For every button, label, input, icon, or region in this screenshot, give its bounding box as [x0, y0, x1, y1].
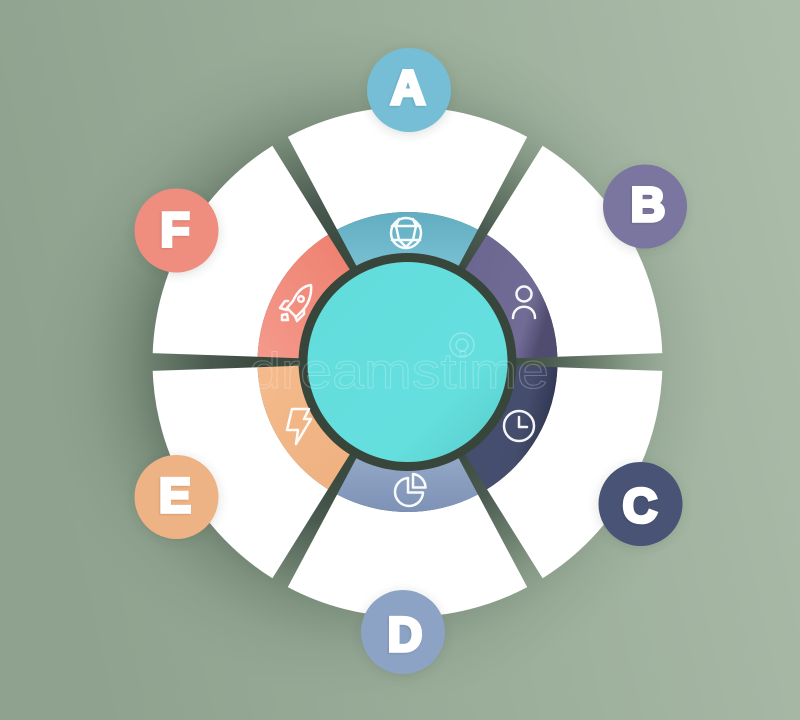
- badge C: C: [623, 480, 657, 533]
- badge D: D: [388, 609, 422, 662]
- panel: D: [288, 494, 527, 617]
- ring segment A: [337, 212, 478, 267]
- icon: pie chart: [395, 474, 426, 506]
- icon: globe: [391, 218, 421, 248]
- center circle: [308, 262, 508, 462]
- watermark: dreamstime: [249, 343, 549, 399]
- badge A: A: [391, 62, 425, 115]
- badge D: [361, 590, 445, 674]
- badge A: [367, 48, 451, 132]
- panel: C: [487, 367, 662, 578]
- badge C: [598, 462, 682, 546]
- icon: rocket: [280, 285, 311, 321]
- badge B: B: [631, 179, 665, 232]
- badge B: [603, 164, 687, 248]
- white content panels: [153, 107, 662, 617]
- icon: person: [513, 286, 535, 318]
- icon: lightning bolt: [287, 409, 311, 444]
- badge F: F: [160, 204, 190, 257]
- ring segment C: [465, 366, 557, 489]
- ring segment F: [258, 235, 350, 358]
- panel: E: [153, 367, 328, 578]
- icon ring segments: [258, 212, 557, 512]
- ring segment B: [465, 235, 557, 358]
- panel: F: [153, 146, 328, 357]
- dark ring around center: [298, 253, 516, 471]
- badge E: E: [159, 470, 191, 523]
- icon: clock: [504, 411, 534, 441]
- ring segment D: [337, 457, 478, 512]
- panel: B: [487, 146, 662, 357]
- ring segment E: [258, 366, 350, 489]
- panel: A: [288, 107, 527, 230]
- badge F: [134, 188, 218, 272]
- badge E: [134, 455, 218, 539]
